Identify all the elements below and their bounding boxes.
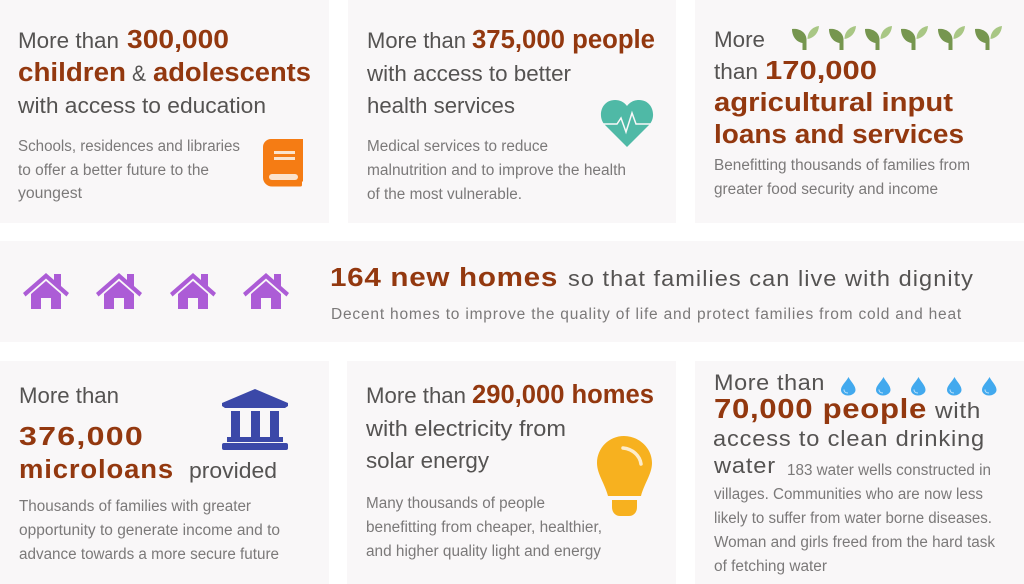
text: agriculture detail [714,157,970,198]
heading: education: with access to education [17,93,266,118]
text: microloans detail: opportunity to generate income and to [19,522,280,539]
heading: health: 375,000 people [472,26,655,54]
heading: education: 300,000 [127,26,229,54]
text: microloans detail: advance towards a more secure future [19,546,279,563]
heading: agriculture: loans and services [714,121,964,149]
heading: solar [365,381,654,473]
panel: agriculture [695,0,1024,223]
heading: education: & [132,61,146,86]
text: water detail: likely to suffer from water borne diseases. [714,510,992,527]
text: solar detail [366,495,602,560]
text: solar detail: Many thousands of people [366,495,545,512]
panel: water [695,361,1024,584]
panel: health [348,0,676,223]
text: agriculture detail: greater food security and income [714,181,938,198]
heading: education: More than [18,28,119,53]
heading: solar: More than [366,383,466,408]
heading: homes: so that families can live with dignity [568,266,974,291]
heading: education: children [18,59,126,87]
heading: health: with access to better [366,61,572,86]
heading: microloans: microloans [19,456,174,484]
text: microloans detail [19,498,280,563]
heading: health [366,26,655,118]
panel: education [0,0,329,223]
icon: bank [222,389,288,450]
heading: agriculture: agricultural input [714,89,954,117]
heading: water: 70,000 people [714,393,927,424]
icon: book [263,139,303,186]
text: microloans detail: Thousands of families with greater [19,498,251,515]
text: homes detail: Decent homes to improve the quality of life and protect families from cold and heat [331,306,962,323]
heading: water [713,370,985,478]
heading: solar: with electricity from [365,416,566,441]
heading: homes: 164 new homes [330,264,558,292]
icons: water drops [841,377,996,396]
heading: education [17,26,311,118]
heading: solar: solar energy [366,448,490,473]
icons: houses [23,273,289,309]
heading: agriculture: More [714,27,765,52]
text: solar detail: and higher quality light and energy [366,543,601,560]
heading: health: health services [367,93,515,118]
text: water detail: of fetching water [714,558,827,575]
text: education detail: Schools, residences and libraries [18,138,240,155]
icon: heart with pulse [601,100,653,147]
heading: water: access to clean drinking [713,426,985,451]
text: education detail: to offer a better future to the [18,162,209,179]
heading: agriculture: 170,000 [765,57,877,85]
text: health detail: malnutrition and to improve the health [367,162,626,179]
text: health detail: Medical services to reduce [367,138,548,155]
text: agriculture detail: Benefitting thousands of families from [714,157,970,174]
heading: microloans: More than [19,383,119,408]
heading: homes [330,264,974,292]
heading: water: More than [714,370,825,395]
text: water detail [714,462,995,575]
text: water detail: villages. Communities who are now less [714,486,983,503]
heading: microloans: 376,000 [19,423,144,451]
heading: water: with [934,398,981,423]
text: water detail: Woman and girls freed from the hard task [714,534,995,551]
icon: light bulb [597,436,652,516]
text: solar detail: benefitting from cheaper, healthier, [366,519,602,536]
icons: sprouts [792,26,1002,50]
heading: water: water [713,453,776,478]
panel: homes band [0,241,1024,342]
heading: solar: 290,000 homes [472,381,654,409]
heading: agriculture [714,27,964,149]
heading: education: adolescents [153,59,311,87]
text: health detail: of the most vulnerable. [367,186,522,203]
panel: solar [347,361,676,584]
text: education detail: youngest [18,185,83,202]
panel: microloans [0,361,329,584]
heading: health: More than [367,28,466,53]
text: education detail [18,138,240,202]
text: health detail [367,138,626,203]
heading: agriculture: than [714,59,758,84]
heading: microloans [19,383,277,484]
heading: microloans: provided [189,458,277,483]
text: water detail: 183 water wells constructed in [787,462,991,479]
